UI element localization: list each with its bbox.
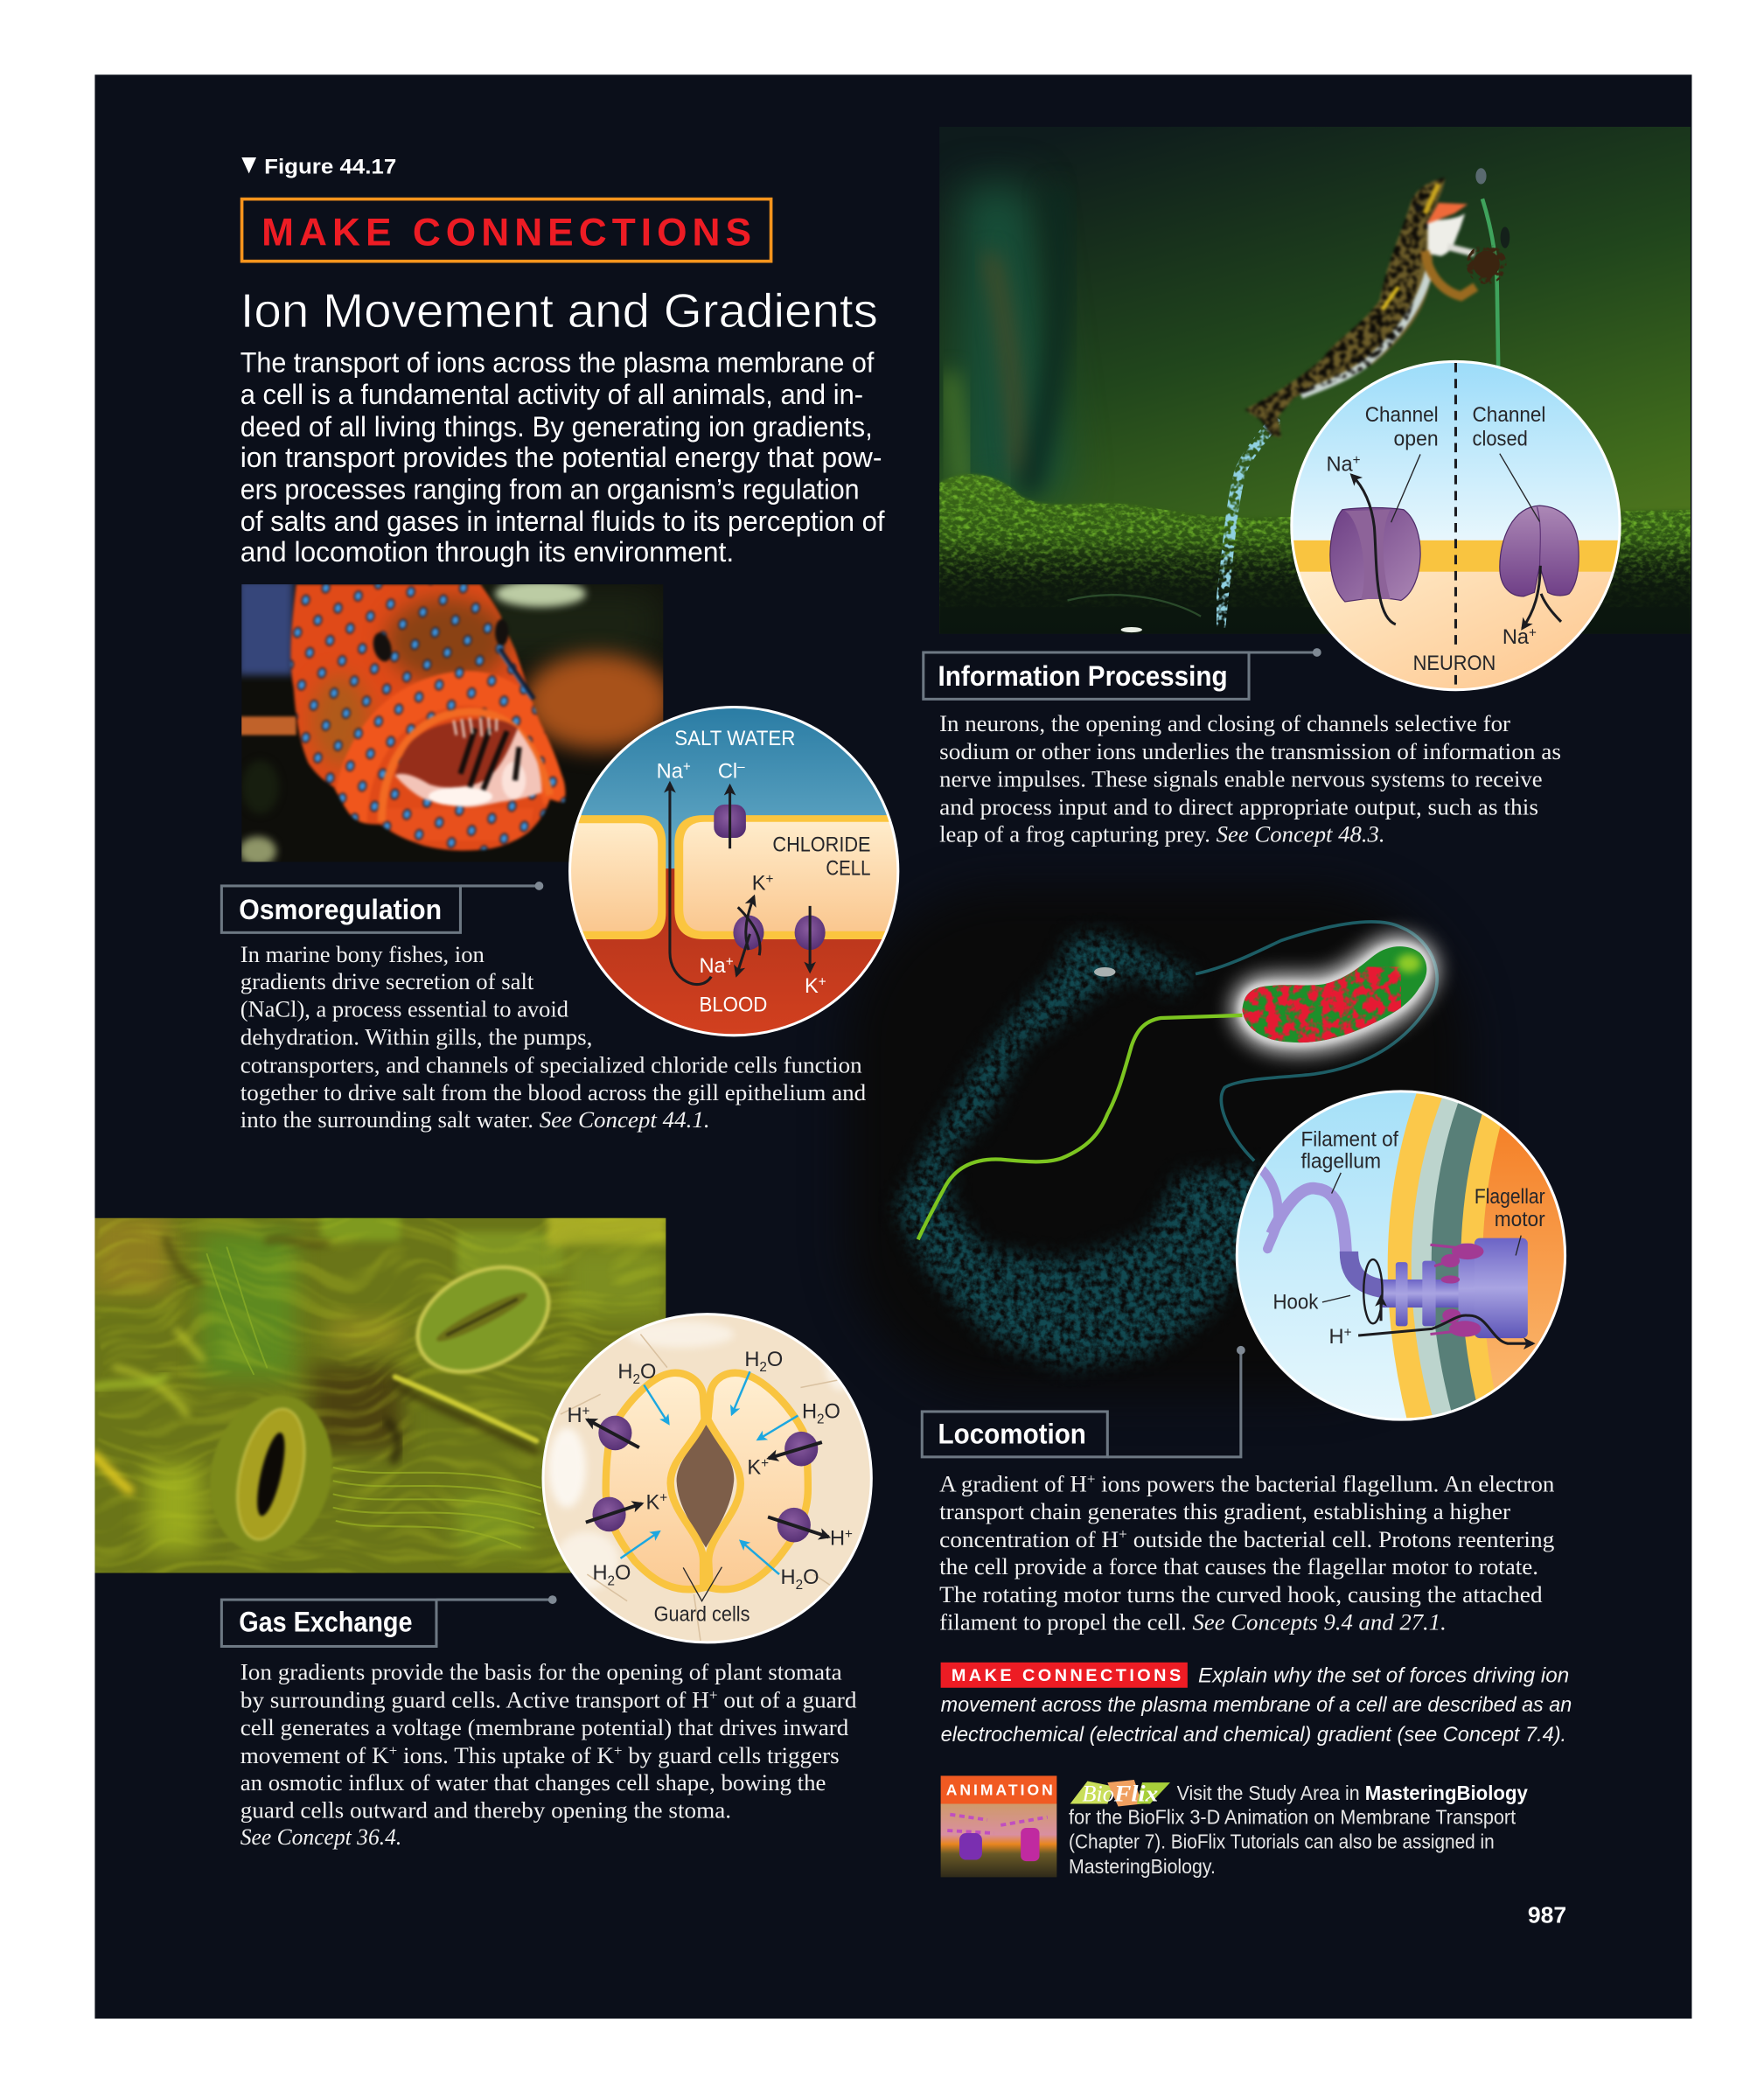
arrow: K+ up bbox=[746, 896, 754, 950]
figure label: Figure 44.17 bbox=[264, 155, 396, 178]
gas exchange text: cell generates a voltage (membrane potential) that drives inward bbox=[241, 1714, 849, 1740]
right guard cell bbox=[708, 1373, 808, 1589]
icon: figure triangle bbox=[241, 157, 256, 173]
panel: information processing bbox=[924, 127, 1691, 847]
panel: gas exchange bbox=[88, 1211, 871, 1850]
heading: information processing: Information Processing bbox=[938, 660, 1228, 692]
locomotion text: + bbox=[1087, 1470, 1095, 1487]
question text: movement across the plasma membrane of a cell are described as an bbox=[941, 1694, 1572, 1717]
pointer lines bbox=[1322, 1173, 1521, 1302]
arrow: H+ bbox=[1358, 1315, 1533, 1343]
label: channel closed: closed bbox=[1473, 429, 1528, 451]
label: Na+ inside: + bbox=[1529, 625, 1537, 640]
label: ions: H bbox=[830, 1528, 845, 1551]
label: flagellar motor: motor bbox=[1495, 1209, 1545, 1231]
label: channel open: open bbox=[1394, 429, 1439, 451]
backdrop: bacterium photo darkfield bbox=[847, 887, 1468, 1394]
label: Na+ outside: + bbox=[1353, 453, 1361, 468]
channel: Cl- bbox=[714, 805, 746, 838]
make connections banner: MAKE CONNECTIONS bbox=[261, 212, 751, 255]
heading: information processing bbox=[924, 648, 1321, 699]
gas exchange text: + bbox=[389, 1742, 397, 1759]
label: water: O bbox=[803, 1566, 819, 1589]
label: Na+: Na bbox=[657, 760, 683, 783]
water arrows bbox=[621, 1371, 798, 1574]
osmoregulation text: (NaCl), a process essential to avoid bbox=[241, 995, 569, 1022]
label: ions: K bbox=[747, 1457, 761, 1480]
information processing text: In neurons, the opening and closing of channels selective for bbox=[939, 710, 1510, 736]
label: filament of flagellum: flagellum bbox=[1301, 1151, 1381, 1174]
intro text: of salts and gases in internal fluids to its perception of bbox=[241, 506, 885, 537]
gas exchange text: + bbox=[709, 1687, 718, 1704]
arrow: Na+ pump bbox=[736, 934, 750, 975]
label: ions bbox=[567, 1405, 853, 1551]
label: water: H bbox=[744, 1349, 759, 1371]
intro text: The transport of ions across the plasma membrane of bbox=[241, 347, 874, 379]
label: water: 2 bbox=[633, 1372, 640, 1387]
heading: gas exchange bbox=[221, 1595, 557, 1646]
intro text: deed of all living things. By generating ion gradients, bbox=[241, 411, 873, 443]
mouth bbox=[394, 717, 519, 790]
arrow: Cl- bbox=[729, 786, 731, 848]
icon: BioFlix logo bbox=[1070, 1780, 1170, 1807]
label: salt water: SALT WATER bbox=[674, 728, 795, 750]
panel: header bbox=[241, 155, 885, 568]
label: flagellar motor bbox=[1475, 1186, 1545, 1231]
label: ions: + bbox=[761, 1456, 769, 1471]
animation text: MasteringBiology bbox=[1365, 1782, 1528, 1804]
animation text: MasteringBiology. bbox=[1069, 1855, 1216, 1878]
water jet bbox=[1219, 417, 1277, 627]
label: water: H bbox=[802, 1401, 817, 1424]
animation thumbnail bbox=[941, 1775, 1056, 1877]
dashed divider bbox=[1454, 363, 1456, 686]
photo: stomata on leaf bbox=[88, 1211, 667, 1573]
bacterium body bbox=[1234, 940, 1434, 1048]
arrow: Na+ out bbox=[1351, 475, 1396, 624]
label: filament of flagellum bbox=[1301, 1128, 1398, 1174]
stoma: open bbox=[194, 1383, 347, 1566]
icon: BioFlix logo: Bio bbox=[1082, 1781, 1114, 1806]
label: water: O bbox=[615, 1562, 631, 1585]
icon: BioFlix logo: Flix bbox=[1113, 1781, 1158, 1806]
label: channel open: Channel bbox=[1365, 404, 1439, 427]
intro text: ion transport provides the potential energy that pow- bbox=[241, 442, 882, 473]
label: guard cells: Guard cells bbox=[654, 1603, 750, 1626]
animation text: (Chapter 7). BioFlix Tutorials can also be assigned in bbox=[1069, 1830, 1495, 1853]
diagram circle: flagellar motor bbox=[1228, 1081, 1565, 1427]
label: neuron: NEURON bbox=[1413, 652, 1496, 675]
question text bbox=[941, 1665, 1572, 1747]
locomotion text: + bbox=[1119, 1526, 1127, 1543]
label: Cl-: Cl bbox=[718, 760, 737, 783]
pointer: channel closed bbox=[1500, 454, 1540, 521]
osmoregulation text: together to drive salt from the blood across the gill epithelium and bbox=[241, 1079, 867, 1105]
locomotion text: filament to propel the cell. See Concepts 9.4 and 27.1. bbox=[939, 1608, 1447, 1635]
label: Na+ blood: Na bbox=[700, 955, 726, 978]
make connections tag: MAKE CONNECTIONS bbox=[952, 1666, 1181, 1685]
diagram circle: chloride cell bbox=[561, 708, 907, 1036]
gas exchange text: + bbox=[614, 1742, 623, 1759]
locomotion text: ions powers the bacterial flagellum. An electron bbox=[1095, 1471, 1554, 1497]
animation text: for the BioFlix 3-D Animation on Membrane Transport bbox=[1069, 1805, 1516, 1828]
label: K+: K bbox=[752, 873, 766, 896]
label: H+: H bbox=[1329, 1326, 1344, 1349]
potassium channel: upper right bbox=[769, 1432, 822, 1467]
label: filament of flagellum: Filament of bbox=[1301, 1128, 1398, 1151]
channel: K+ bbox=[795, 915, 826, 950]
information processing text: sodium or other ions underlies the transmission of information as bbox=[939, 738, 1561, 764]
label: flagellar motor: Flagellar bbox=[1475, 1186, 1545, 1209]
label: water: 2 bbox=[608, 1573, 615, 1588]
potassium channel: lower left bbox=[586, 1497, 642, 1531]
label: water: H bbox=[592, 1562, 608, 1585]
label: Na+ blood: + bbox=[726, 954, 734, 969]
locomotion text: transport chain generates this gradient, establishing a higher bbox=[939, 1498, 1510, 1524]
label: water: H bbox=[781, 1566, 796, 1589]
gas exchange text: movement of K bbox=[241, 1742, 387, 1768]
osmoregulation text: into the surrounding salt water. See Concept 44.1. bbox=[241, 1106, 710, 1133]
gas exchange text: ions. This uptake of K bbox=[397, 1742, 614, 1768]
pointer: guard cells bbox=[683, 1567, 722, 1601]
label: water bbox=[592, 1349, 840, 1593]
animation text bbox=[1069, 1782, 1528, 1878]
information processing text: and process input and to direct appropriate output, such as this bbox=[939, 793, 1538, 819]
osmoregulation text bbox=[241, 941, 867, 1133]
gas exchange text: an osmotic influx of water that changes cell shape, bowing the bbox=[241, 1769, 826, 1796]
gas exchange text bbox=[241, 1659, 857, 1850]
gas exchange text: out of a guard bbox=[718, 1687, 857, 1713]
leaf ridges bbox=[94, 1238, 540, 1548]
heading: gas exchange: Gas Exchange bbox=[239, 1607, 413, 1638]
frog bbox=[1245, 168, 1510, 437]
label: water: O bbox=[640, 1361, 656, 1384]
label: channel closed bbox=[1473, 404, 1545, 451]
left guard cell bbox=[606, 1373, 705, 1589]
page number: 987 bbox=[1528, 1903, 1566, 1928]
heading: osmoregulation: Osmoregulation bbox=[239, 894, 442, 925]
animation thumbnail: ANIMATION bbox=[946, 1782, 1053, 1799]
locomotion text: A gradient of H bbox=[939, 1471, 1085, 1497]
label: channel open bbox=[1365, 404, 1439, 451]
panel: osmoregulation bbox=[221, 579, 907, 1133]
title: Ion Movement and Gradients bbox=[241, 283, 878, 338]
label: Na+ outside: Na bbox=[1326, 454, 1353, 477]
motor bbox=[1383, 1238, 1528, 1338]
label: ions: K bbox=[645, 1491, 659, 1514]
label: ions: + bbox=[659, 1491, 667, 1506]
label: ions: + bbox=[582, 1405, 590, 1419]
photo: bacterium with flagellum bbox=[896, 922, 1437, 1368]
gas exchange text: See Concept 36.4. bbox=[241, 1824, 401, 1850]
moss and water bbox=[939, 474, 1691, 635]
label: H+: + bbox=[1344, 1326, 1352, 1341]
pore bbox=[677, 1422, 734, 1548]
arrow: K+ down bbox=[809, 906, 811, 972]
intro text: and locomotion through its environment. bbox=[241, 536, 734, 568]
filament bbox=[1262, 1170, 1346, 1261]
photo: leaping frog bbox=[939, 127, 1691, 635]
heading: locomotion: Locomotion bbox=[938, 1419, 1086, 1450]
arrow: Na+ in bbox=[1523, 566, 1540, 629]
diagram circle: neuron channels bbox=[1292, 361, 1620, 690]
locomotion text bbox=[939, 1470, 1554, 1635]
make connections banner bbox=[242, 199, 771, 262]
question text: Explain why the set of forces driving ion bbox=[1198, 1665, 1569, 1688]
pump: cotransporter bbox=[733, 915, 763, 950]
label: water: O bbox=[825, 1401, 840, 1424]
gas exchange text: Ion gradients provide the basis for the opening of plant stomata bbox=[241, 1659, 842, 1685]
locomotion text: the cell provide a force that causes the flagellar motor to rotate. bbox=[939, 1553, 1538, 1579]
label: K+: + bbox=[766, 872, 774, 887]
osmoregulation text: dehydration. Within gills, the pumps, bbox=[241, 1023, 592, 1049]
information processing text: leap of a frog capturing prey. See Concept 48.3. bbox=[939, 821, 1385, 847]
label: chloride cell bbox=[772, 833, 871, 881]
photo: coral grouper fish bbox=[238, 579, 673, 866]
channel open bbox=[1330, 507, 1420, 602]
fish body bbox=[287, 582, 574, 855]
label: hook: Hook bbox=[1272, 1292, 1319, 1314]
label: ions: + bbox=[845, 1527, 853, 1542]
locomotion text: outside the bacterial cell. Protons reentering bbox=[1127, 1526, 1554, 1552]
stoma: closed bbox=[400, 1246, 566, 1392]
panel: animation resource bbox=[941, 1775, 1528, 1878]
information processing text: nerve impulses. These signals enable nervous systems to receive bbox=[939, 765, 1543, 791]
panel: locomotion bbox=[896, 922, 1565, 1635]
arrow: cotransport arc bbox=[738, 907, 760, 955]
label: K+ blood: K bbox=[805, 975, 819, 998]
gas exchange text: by surrounding guard cells. Active transport of H bbox=[241, 1687, 699, 1713]
osmoregulation text: gradients drive secretion of salt bbox=[241, 968, 534, 994]
label: Na+: + bbox=[683, 760, 691, 775]
osmoregulation text: In marine bony fishes, ion bbox=[241, 941, 485, 967]
proton pump: upper left bbox=[587, 1416, 639, 1450]
flagellum bbox=[918, 1015, 1242, 1239]
intro text: a cell is a fundamental activity of all animals, and in- bbox=[241, 379, 863, 410]
label: Cl-: – bbox=[737, 760, 745, 775]
label: water: O bbox=[767, 1349, 783, 1371]
heading: locomotion bbox=[922, 1346, 1245, 1457]
heading: osmoregulation bbox=[221, 882, 543, 932]
label: water: H bbox=[617, 1361, 633, 1384]
label: Na+ inside: Na bbox=[1503, 626, 1529, 649]
question text: electrochemical (electrical and chemical) gradient (see Concept 7.4). bbox=[941, 1724, 1566, 1747]
arrow: rotation bbox=[1363, 1259, 1383, 1323]
channel closed bbox=[1500, 506, 1579, 596]
label: blood: BLOOD bbox=[700, 994, 767, 1016]
arrow: Na+ bbox=[670, 783, 711, 985]
label: ions: H bbox=[567, 1405, 582, 1427]
label: chloride cell: CELL bbox=[826, 858, 871, 881]
label: channel closed: Channel bbox=[1473, 404, 1545, 427]
diagram circle: guard cells bbox=[543, 1314, 871, 1642]
locomotion text: concentration of H bbox=[939, 1526, 1114, 1552]
label: water: 2 bbox=[817, 1412, 825, 1427]
gas exchange text: guard cells outward and thereby opening the stoma. bbox=[241, 1797, 731, 1824]
label: K+ blood: + bbox=[819, 974, 826, 989]
locomotion text: The rotating motor turns the curved hook, causing the attached bbox=[939, 1581, 1543, 1607]
gas exchange text: by guard cells triggers bbox=[623, 1742, 840, 1768]
hook bbox=[1349, 1252, 1398, 1290]
pointer: channel open bbox=[1391, 454, 1420, 522]
panel: make connections question bbox=[941, 1663, 1572, 1747]
proton pump: lower right bbox=[768, 1508, 828, 1542]
information processing text bbox=[939, 710, 1561, 847]
osmoregulation text: cotransporters, and channels of specialized chloride cells function bbox=[241, 1052, 862, 1078]
label: water: 2 bbox=[796, 1578, 803, 1593]
intro text: ers processes ranging from an organism’s regulation bbox=[241, 474, 860, 506]
animation text: Visit the Study Area in bbox=[1177, 1782, 1360, 1804]
label: chloride cell: CHLORIDE bbox=[772, 833, 871, 856]
label: water: 2 bbox=[759, 1360, 767, 1375]
dust cloud bbox=[896, 934, 1261, 1368]
intro text bbox=[241, 347, 885, 568]
